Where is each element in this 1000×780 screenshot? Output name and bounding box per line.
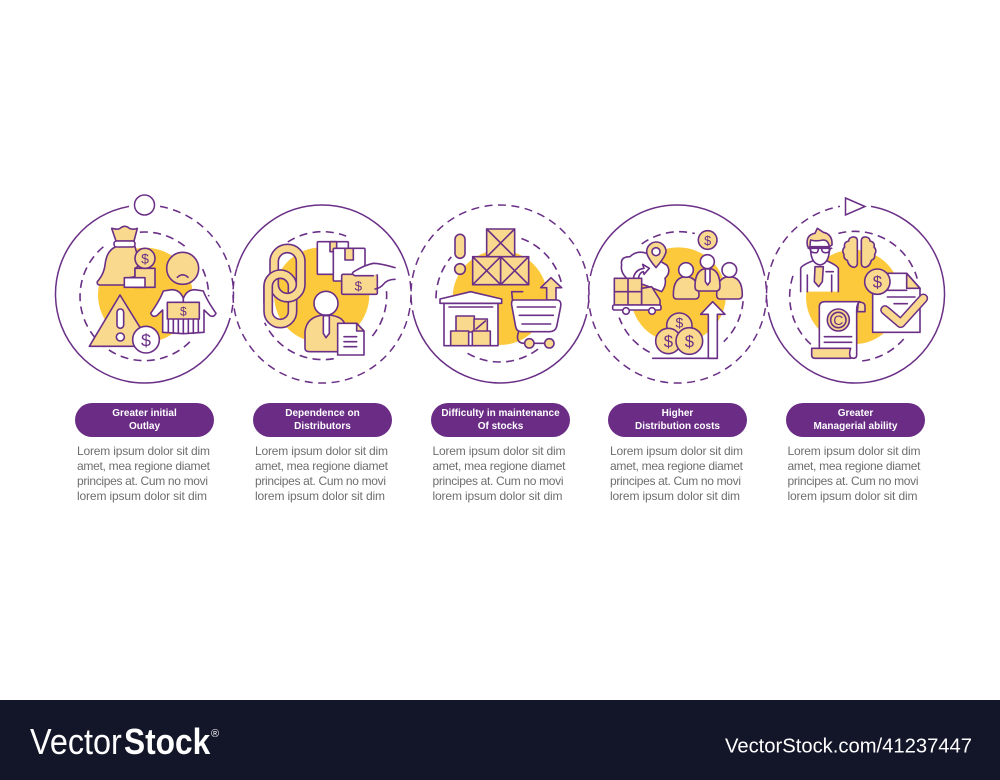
- icon: chain, boxes, cash hand and employee: [264, 232, 395, 360]
- body text: lorem ipsum dolor sit dim: [255, 489, 385, 503]
- ring with end arrow: [767, 198, 945, 383]
- icon: money bag, sad face, warning and hands: $: [141, 251, 149, 267]
- body text: principes at. Cum no movi: [610, 474, 741, 488]
- body text: lorem ipsum dolor sit dim: [788, 489, 918, 503]
- icon: crates, warehouse and shopping cart: [436, 229, 562, 362]
- body text: Lorem ipsum dolor sit dim: [77, 444, 210, 458]
- icon: manager, brain, approved document and copyright scroll: $: [873, 273, 882, 292]
- body text: lorem ipsum dolor sit dim: [77, 489, 207, 503]
- heading pill: Distribution costs: [635, 421, 720, 432]
- body text: Lorem ipsum dolor sit dim: [432, 444, 566, 458]
- body text: amet, mea regione diamet: [610, 459, 744, 473]
- body text: amet, mea regione diamet: [788, 459, 921, 473]
- ring: [233, 205, 411, 383]
- footer image id: VectorStock.com/41237447: [725, 736, 972, 758]
- icon: delivery truck, map pin, team, coins and arrow: $: [685, 332, 694, 351]
- body text: principes at. Cum no movi: [255, 474, 386, 488]
- ring: [411, 205, 589, 383]
- heading pill: [75, 403, 214, 437]
- panel: difficulty in maintenance of stocks: [411, 205, 589, 503]
- body text: lorem ipsum dolor sit dim: [432, 489, 562, 503]
- heading pill: [786, 403, 925, 437]
- panel: greater managerial ability: [767, 198, 945, 503]
- heading pill: [253, 403, 392, 437]
- body text: lorem ipsum dolor sit dim: [610, 489, 740, 503]
- footer bar: [0, 700, 1000, 780]
- icon: manager, brain, approved document and copyright scroll: [790, 228, 923, 361]
- body text: amet, mea regione diamet: [77, 459, 211, 473]
- body text: principes at. Cum no movi: [77, 474, 208, 488]
- heading pill: [608, 403, 747, 437]
- ring with start marker: [55, 195, 233, 383]
- body text: principes at. Cum no movi: [432, 474, 564, 488]
- icon: money bag, sad face, warning and hands: [80, 226, 216, 361]
- icon: money bag, sad face, warning and hands: $: [180, 305, 187, 319]
- panel: dependence on distributors: [233, 205, 411, 503]
- body text: principes at. Cum no movi: [788, 474, 918, 488]
- heading pill: Greater initial: [112, 408, 177, 419]
- heading pill: Difficulty in maintenance: [441, 408, 560, 419]
- heading pill: Managerial ability: [814, 421, 898, 432]
- heading pill: Of stocks: [478, 421, 524, 432]
- infographic canvas: [0, 194, 1000, 780]
- icon: delivery truck, map pin, team, coins and arrow: [613, 231, 743, 358]
- icon: money bag, sad face, warning and hands: $: [141, 330, 151, 350]
- ring: [588, 205, 767, 383]
- panel: greater initial outlay: [55, 195, 233, 503]
- body text: Lorem ipsum dolor sit dim: [788, 444, 920, 458]
- heading pill: Higher: [662, 408, 693, 419]
- body text: Lorem ipsum dolor sit dim: [610, 444, 743, 458]
- body text: amet, mea regione diamet: [432, 459, 566, 473]
- body text: Lorem ipsum dolor sit dim: [255, 444, 388, 458]
- heading pill: Outlay: [129, 421, 160, 432]
- icon: delivery truck, map pin, team, coins and arrow: $: [675, 315, 683, 331]
- heading pill: [431, 403, 570, 437]
- panel: higher distribution costs: [588, 205, 767, 503]
- icon: delivery truck, map pin, team, coins and arrow: $: [664, 332, 673, 351]
- heading pill: Dependence on: [285, 408, 360, 419]
- footer logo: ®: [211, 728, 219, 740]
- icon: manager, brain, approved document and copyright scroll: C: [833, 312, 843, 328]
- footer logo: Vector: [30, 722, 122, 762]
- heading pill: Distributors: [294, 421, 351, 432]
- icon: chain, boxes, cash hand and employee: $: [355, 278, 363, 293]
- body text: amet, mea regione diamet: [255, 459, 389, 473]
- footer logo: [30, 722, 219, 762]
- icon: delivery truck, map pin, team, coins and arrow: $: [704, 234, 711, 248]
- heading pill: Greater: [838, 408, 873, 419]
- footer logo: Stock: [124, 722, 210, 762]
